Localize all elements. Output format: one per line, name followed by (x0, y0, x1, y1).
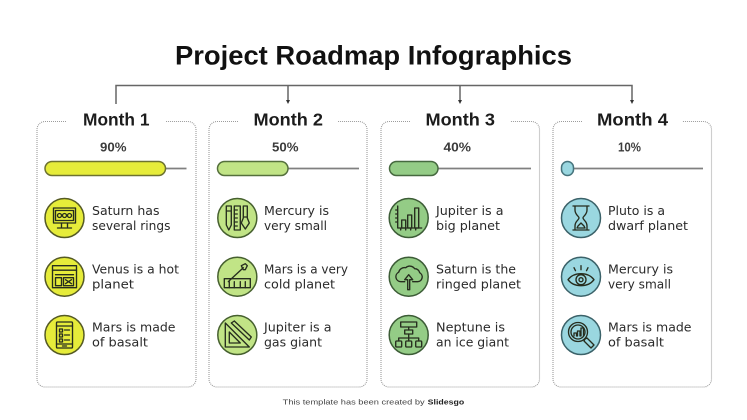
panel: month 2 (209, 110, 367, 387)
text: Mercury is (608, 262, 673, 276)
heading: month 1: Month 1 (83, 110, 150, 130)
footer credit (283, 398, 465, 406)
text (264, 203, 329, 233)
text: Venus is a hot (92, 262, 179, 276)
text (92, 262, 179, 292)
text: Mercury is (264, 203, 329, 218)
percentage: 10%: 10% (618, 141, 641, 155)
text: Mars is a very (264, 262, 349, 276)
text: several rings (92, 218, 170, 233)
progress bar: 50% (218, 162, 359, 176)
panel outline 2 (209, 122, 367, 387)
footer credit: This template has been created by (283, 398, 425, 406)
text: Mars is made (92, 320, 176, 334)
item: Mars is made of basalt (562, 316, 692, 354)
item: Mars is made of basalt (45, 316, 176, 354)
heading: month 4: Month 4 (597, 110, 668, 130)
panel: month 3 (381, 110, 540, 387)
icon: eye (568, 266, 594, 286)
text (264, 262, 349, 292)
text: big planet (436, 218, 500, 233)
text: Jupiter is a (263, 320, 332, 334)
connector arrows (116, 86, 634, 104)
progress bar: 10% (562, 162, 703, 176)
text (608, 203, 688, 233)
panel: month 1 (37, 110, 196, 387)
text: of basalt (92, 334, 148, 350)
text: dwarf planet (608, 218, 688, 233)
percentage: 50%: 50% (272, 141, 298, 155)
panel outline 4 (553, 122, 712, 387)
percentage: 90%: 90% (100, 141, 126, 155)
text: an ice giant (436, 334, 509, 350)
text (436, 262, 521, 292)
progress bar: 40% (390, 162, 531, 176)
text (436, 320, 509, 350)
text: Pluto is a (608, 203, 665, 218)
text: of basalt (608, 334, 664, 350)
text: Saturn is the (436, 262, 516, 276)
item: Neptune is an ice giant (389, 316, 509, 354)
icon: magnifier with chart (568, 322, 594, 348)
item: Mercury is very small (562, 257, 673, 296)
item: Venus is a hot planet (45, 257, 179, 296)
panel: month 4 (553, 110, 712, 387)
item: Saturn has several rings (45, 198, 170, 238)
text: Saturn has (92, 203, 160, 218)
item: Mercury is very small (218, 198, 329, 238)
icon: browser window (52, 266, 76, 288)
text: Jupiter is a (435, 203, 504, 218)
text: very small (264, 218, 327, 233)
heading: month 3: Month 3 (426, 110, 495, 130)
title: Project Roadmap Infographics (175, 40, 572, 70)
icon: tablet checklist (56, 322, 72, 348)
icon: pencil, ruler and brush (226, 206, 249, 230)
text: planet (92, 276, 134, 292)
item: Pluto is a dwarf planet (562, 198, 688, 238)
heading: month 2: Month 2 (254, 110, 323, 130)
text (263, 320, 332, 350)
panel outline 1 (37, 122, 196, 387)
footer credit: Slidesgo (428, 398, 465, 406)
text: Neptune is (436, 320, 505, 334)
percentage: 40%: 40% (444, 141, 471, 155)
icon: flow chart (396, 322, 422, 347)
icon: bar chart (396, 206, 422, 230)
item: Jupiter is a gas giant (218, 316, 332, 354)
icon: cloud upload (396, 266, 422, 290)
text: gas giant (264, 334, 322, 350)
icon: hourglass (573, 206, 589, 230)
text: cold planet (264, 276, 335, 292)
icon: set square and pencil (225, 321, 251, 347)
text (608, 320, 692, 350)
text (92, 203, 170, 233)
text (92, 320, 176, 350)
panel outline 3 (381, 122, 540, 387)
icon: brush over ruler (224, 264, 250, 288)
text: ringed planet (436, 276, 521, 292)
item: Jupiter is a big planet (389, 198, 504, 238)
icon: monitor (54, 208, 76, 228)
item: Mars is a very cold planet (218, 257, 349, 296)
text (435, 203, 504, 233)
progress bar: 90% (45, 162, 186, 176)
text: Mars is made (608, 320, 692, 334)
item: Saturn is the ringed planet (389, 257, 521, 296)
text: very small (608, 276, 671, 292)
text (608, 262, 673, 292)
